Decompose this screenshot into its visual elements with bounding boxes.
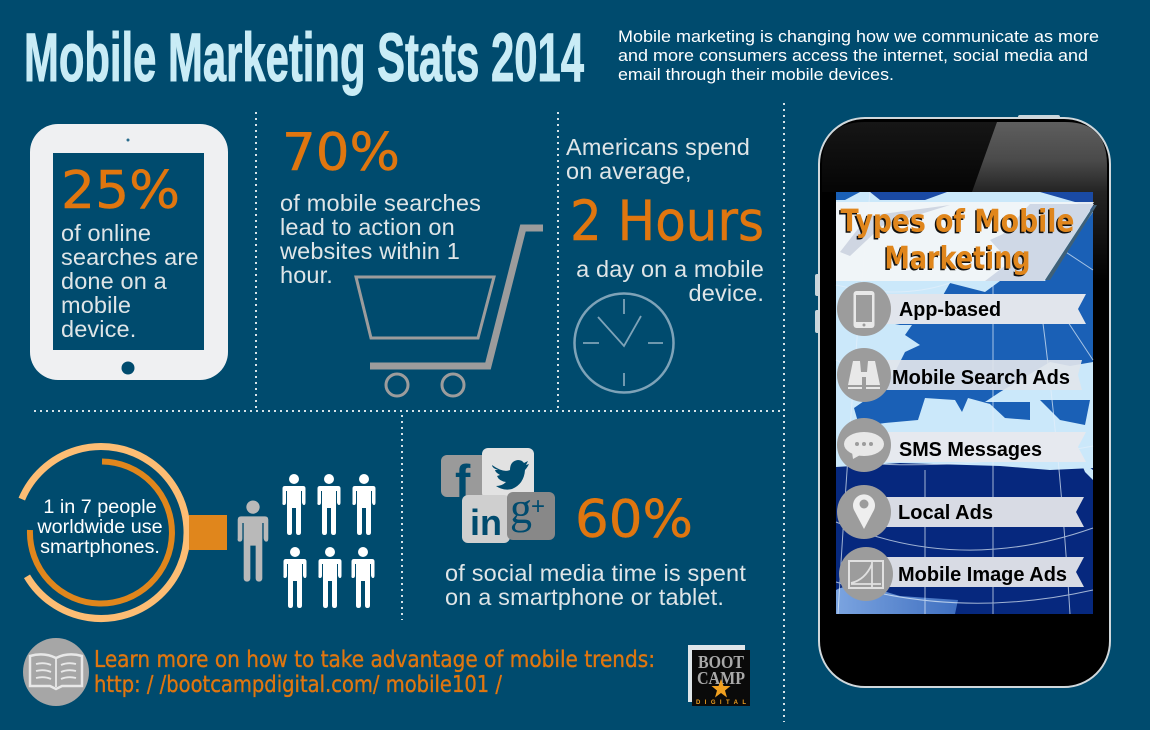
icons: social media: g xyxy=(510,484,532,533)
text: 1 in 7 people: 1 in 7 people xyxy=(43,496,157,518)
stat: 25%: 25% xyxy=(61,161,180,221)
text: online searches: mobile xyxy=(61,292,131,318)
text: mobile searches: of mobile searches xyxy=(280,190,481,216)
text: learn more link xyxy=(94,647,655,698)
text: social media time xyxy=(445,560,746,610)
text: social media time: on a smartphone or tablet. xyxy=(445,584,724,610)
item: sms messages: SMS Messages xyxy=(899,439,1042,461)
panel: 25% tablet stat xyxy=(30,124,228,380)
item: mobile search ads: Mobile Search Ads xyxy=(892,367,1070,389)
text: online searches: of online xyxy=(61,220,151,246)
text: a day on mobile xyxy=(576,256,764,306)
text: social media time: of social media time is spent xyxy=(445,560,746,586)
panel: 70% cart stat xyxy=(279,123,543,396)
text: mobile searches xyxy=(279,190,481,288)
panel: 1 in 7 stat xyxy=(22,447,376,619)
banner: types of mobile marketing: Types of Mobile xyxy=(839,205,1073,241)
phone body xyxy=(815,115,1110,687)
item: mobile image ads: Mobile Image Ads xyxy=(898,564,1067,586)
logo: boot camp digital: BOOT xyxy=(698,652,744,672)
item: local ads: Local Ads xyxy=(898,502,993,524)
icon: people group xyxy=(238,474,376,608)
logo: boot camp digital xyxy=(688,645,750,706)
panel: phone xyxy=(815,115,1110,687)
icon: book xyxy=(23,638,89,706)
icon: tablet xyxy=(30,124,228,380)
text: 1 in 7 people: worldwide use xyxy=(36,516,163,538)
banner: types of mobile marketing xyxy=(836,202,1097,281)
stat: 2 hours: 2 Hours xyxy=(570,189,764,253)
item: app-based xyxy=(837,282,1086,336)
logo: boot camp digital: DIGITAL xyxy=(696,700,746,706)
item: sms messages xyxy=(837,418,1086,472)
item: mobile search ads xyxy=(837,348,1082,402)
text: 1 in 7 people xyxy=(36,496,163,558)
phone screen: globe xyxy=(836,192,1093,614)
stat: 70%: 70% xyxy=(282,123,400,183)
intro text: Mobile marketing is changing how we communicate as more xyxy=(618,28,1099,46)
icon: shopping cart xyxy=(356,228,543,396)
icons: social media: + xyxy=(531,493,545,520)
intro text: email through their mobile devices. xyxy=(618,66,894,84)
text: learn more link: http: / /bootcampdigital.com/ mobile101 / xyxy=(94,672,502,698)
banner: types of mobile marketing: Marketing xyxy=(883,242,1029,278)
text: a day on mobile: device. xyxy=(689,280,764,306)
icon: clock xyxy=(574,294,674,392)
ring graphic xyxy=(22,447,227,619)
banner: types of mobile marketing: Marketing xyxy=(884,240,1030,276)
item: app-based: App-based xyxy=(899,299,1001,321)
panel: 2 hours stat xyxy=(566,134,764,392)
text: americans spend: Americans spend xyxy=(566,134,750,160)
text: americans spend xyxy=(566,134,750,184)
item: mobile image ads xyxy=(839,547,1084,601)
banner: types of mobile marketing: Types of Mobile xyxy=(840,204,1074,240)
logo: boot camp digital: CAMP xyxy=(697,668,745,688)
text: 1 in 7 people: smartphones. xyxy=(40,536,160,558)
text: online searches: searches are xyxy=(61,244,199,270)
text: mobile searches: websites within 1 xyxy=(279,238,460,264)
stat: 60%: 60% xyxy=(575,490,693,550)
text: mobile searches: lead to action on xyxy=(280,214,455,240)
panel: footer call to action xyxy=(23,638,750,706)
title: Mobile Marketing Stats 2014 xyxy=(24,19,584,96)
text: americans spend: on average, xyxy=(566,158,692,184)
icons: social media: in xyxy=(470,502,502,543)
icons: social media xyxy=(441,448,555,543)
intro text xyxy=(618,28,1099,84)
icons: social media: f xyxy=(455,455,471,507)
text: mobile searches: hour. xyxy=(280,262,333,288)
text: online searches xyxy=(61,220,199,342)
text: a day on mobile: a day on a mobile xyxy=(576,256,764,282)
text: online searches: done on a xyxy=(61,268,168,294)
text: learn more link: Learn more on how to take advantage of mobile trends: xyxy=(94,647,655,673)
text: online searches: device. xyxy=(61,316,136,342)
item: local ads xyxy=(837,485,1084,539)
panel: 60% social stat xyxy=(441,448,746,610)
intro text: and more consumers access the internet, social media and xyxy=(618,47,1088,65)
